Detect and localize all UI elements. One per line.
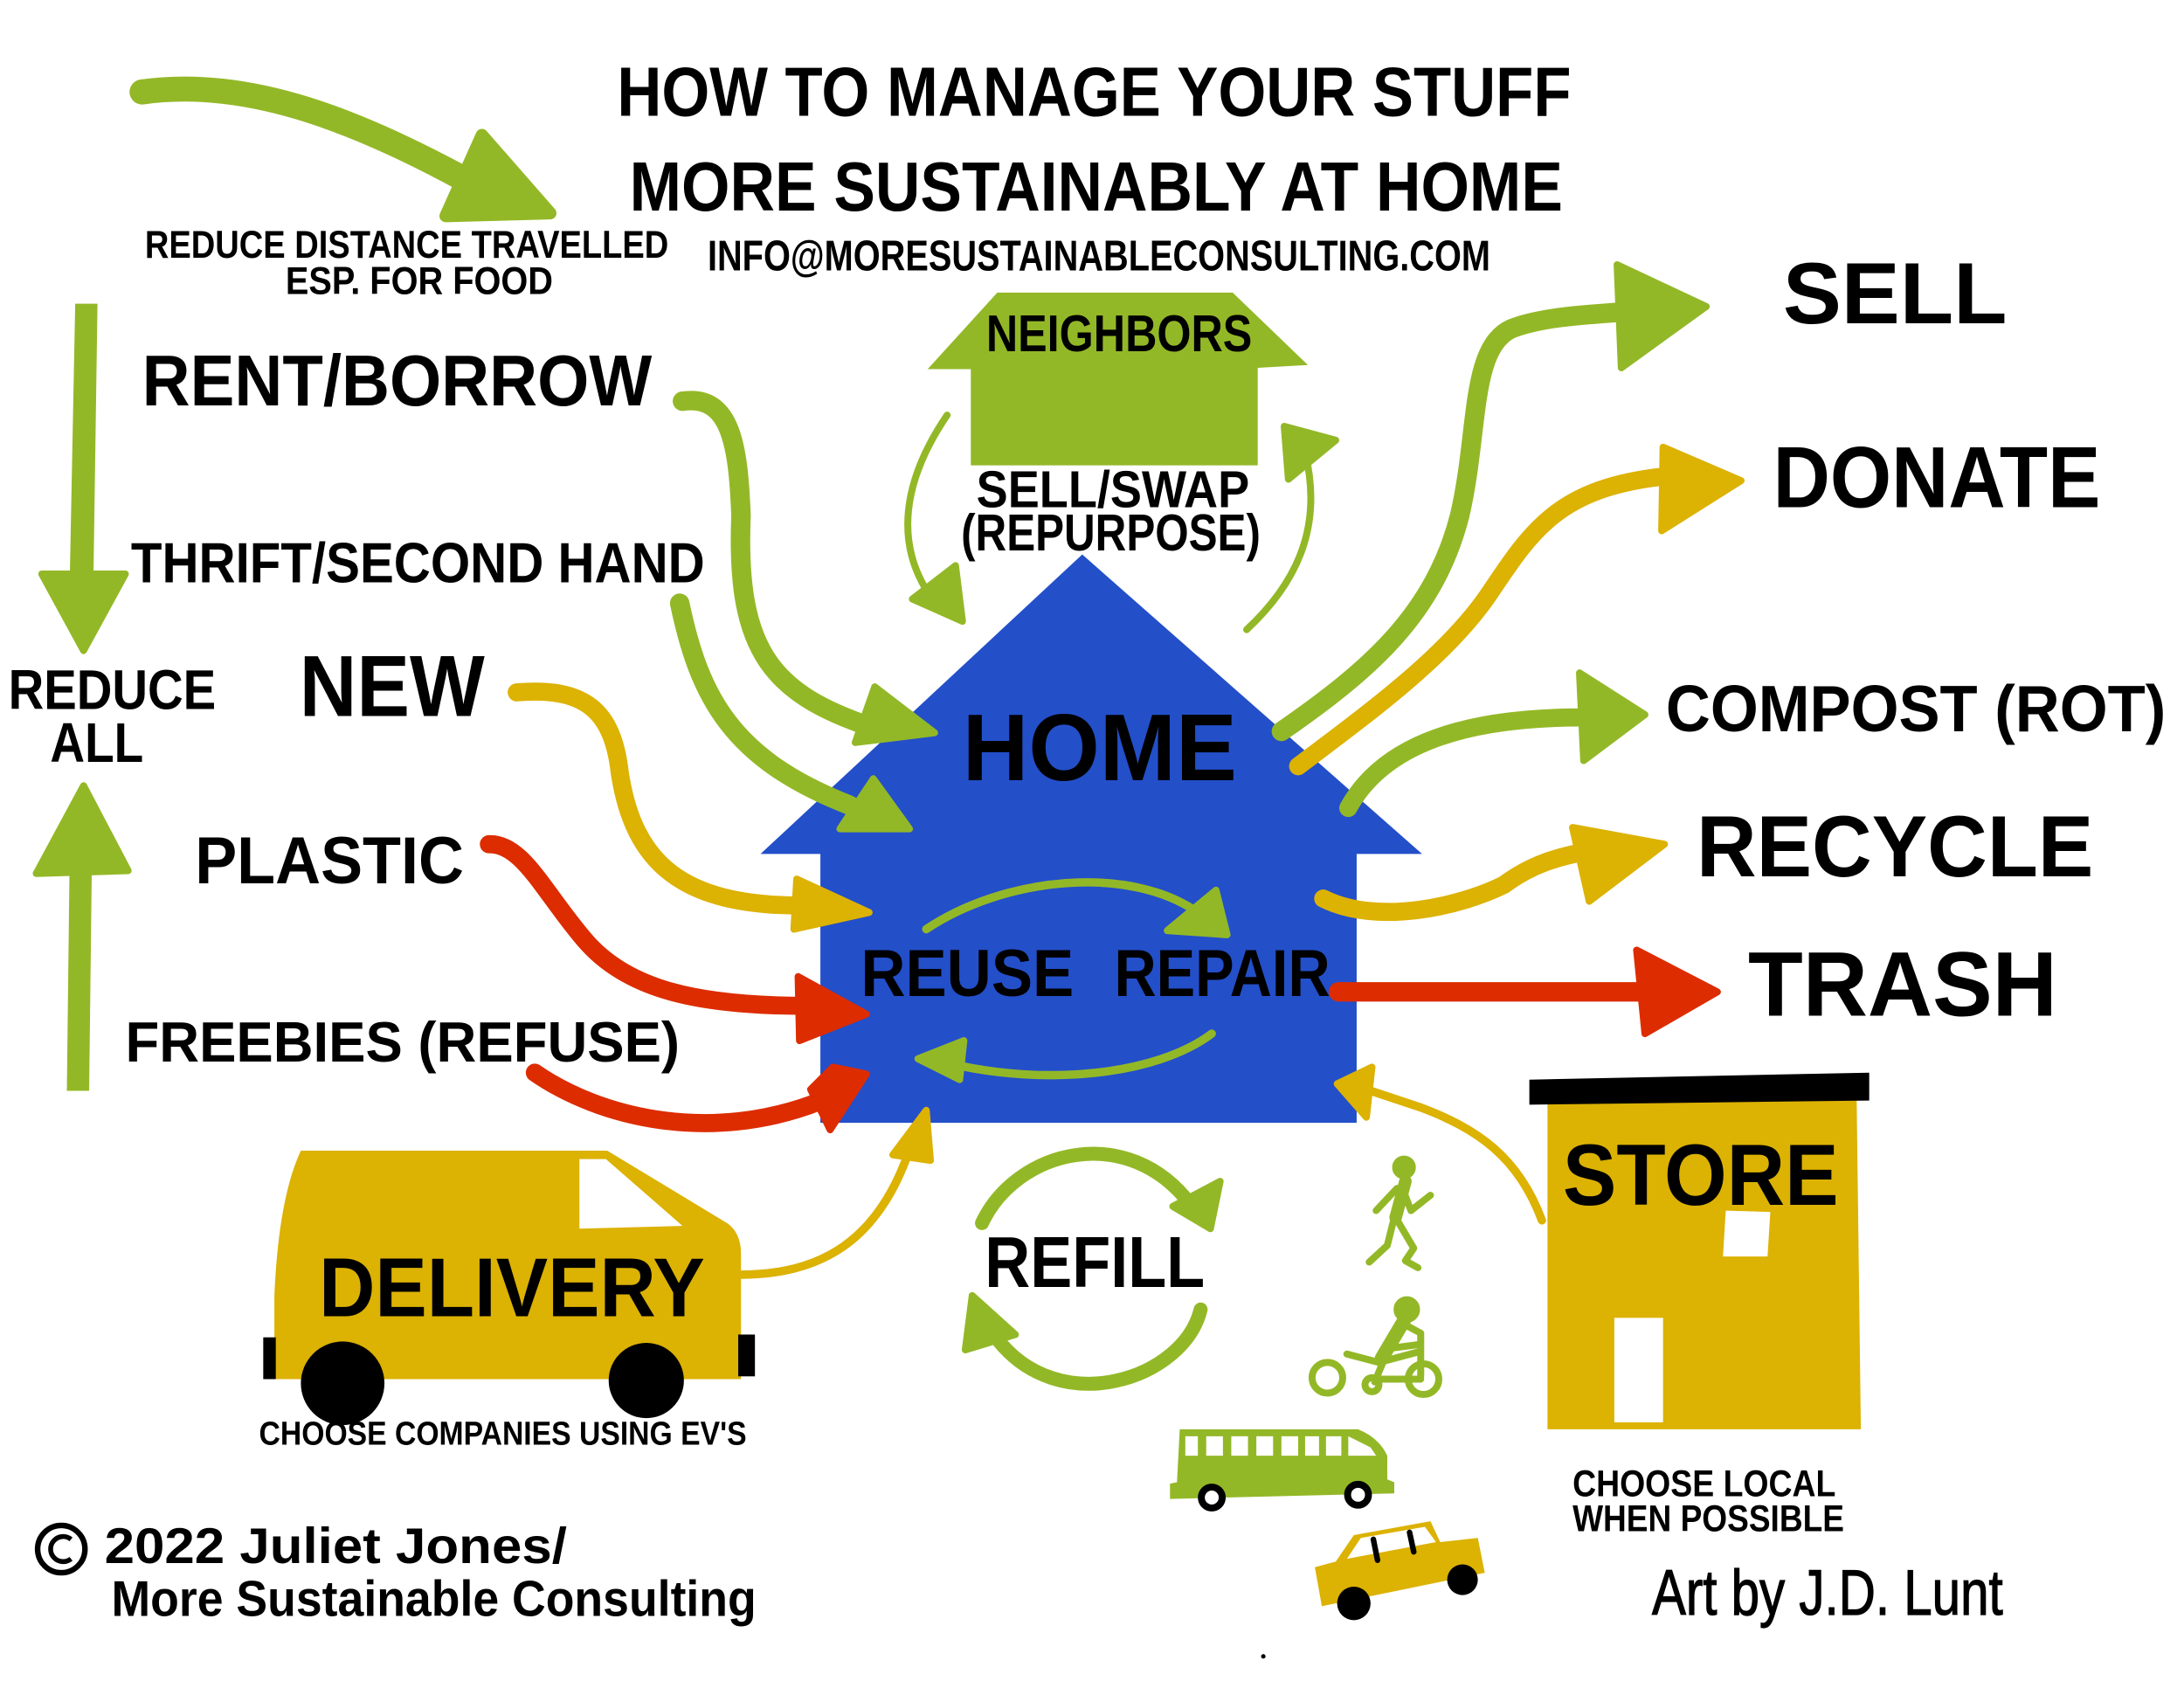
reuse repair label: REUSE bbox=[860, 937, 1074, 1011]
home label: HOME bbox=[963, 695, 1237, 800]
reduce all label bbox=[9, 659, 216, 774]
compost label: COMPOST (ROT) bbox=[1666, 672, 2166, 745]
reuse repair label: REPAIR bbox=[1115, 937, 1330, 1011]
store label: STORE bbox=[1563, 1127, 1839, 1223]
arrow: compost bbox=[1348, 673, 1645, 808]
rent/borrow label: RENT/BORROW bbox=[142, 340, 653, 421]
arrow: new bbox=[517, 692, 869, 929]
copyright credit: 2022 Juliet Jones/ bbox=[105, 1519, 567, 1574]
trash label: TRASH bbox=[1748, 933, 2057, 1035]
arrow: thrift bbox=[680, 603, 909, 829]
reduce all label: REDUCE bbox=[9, 659, 216, 722]
title: MORE SUSTAINABLY AT HOME bbox=[630, 148, 1563, 225]
arrow: repair bbox=[918, 1034, 1212, 1080]
refill label: REFILL bbox=[985, 1221, 1205, 1303]
arrow: freebies bbox=[535, 1067, 867, 1130]
arrow: recycle bbox=[1324, 827, 1664, 912]
arrow: rent bbox=[682, 401, 935, 743]
arrow: delivery to home bbox=[741, 1110, 930, 1275]
recycle label: RECYCLE bbox=[1697, 799, 2093, 895]
reduce distance label: REDUCE DISTANCE TRAVELLED bbox=[145, 224, 668, 266]
icon: cyclist bbox=[1312, 1300, 1439, 1394]
reduce distance label: ESP. FOR FOOD bbox=[286, 259, 553, 302]
arrow: donate bbox=[1298, 447, 1741, 766]
arrow: to neighbors left bbox=[908, 415, 963, 621]
neighbors house bbox=[928, 293, 1308, 466]
reuse repair label bbox=[860, 937, 1330, 1011]
plastic label: PLASTIC bbox=[195, 824, 464, 898]
sell/swap label: (REPURPOSE) bbox=[961, 504, 1261, 562]
delivery note: CHOOSE COMPANIES USING EV'S bbox=[259, 1415, 747, 1452]
arrow: sell bbox=[1282, 265, 1706, 731]
arrow: plastic bbox=[489, 844, 867, 1041]
art credit: Art by J.D. Lunt bbox=[1652, 1557, 2003, 1629]
sell/swap label bbox=[961, 460, 1261, 562]
arrow: reuse bbox=[926, 882, 1227, 935]
choose local note bbox=[1572, 1463, 1844, 1539]
choose local note: WHEN POSSIBLE bbox=[1572, 1498, 1844, 1539]
icon: bus bbox=[1170, 1429, 1394, 1508]
delivery label: DELIVERY bbox=[319, 1242, 705, 1335]
icon: walker bbox=[1369, 1159, 1430, 1268]
arrow: reduce distance bbox=[142, 89, 550, 216]
contact email: INFO@MORESUSTAINABLECONSULTING.COM bbox=[708, 232, 1490, 280]
arrow: reduce all up bbox=[36, 785, 128, 1090]
arrow: store to home bbox=[1337, 1067, 1542, 1221]
delivery van bbox=[263, 1151, 755, 1425]
donate label: DONATE bbox=[1773, 429, 2100, 525]
title bbox=[617, 52, 1571, 225]
sell/swap label: SELL/SWAP bbox=[977, 460, 1249, 518]
reduce distance label bbox=[145, 224, 668, 302]
sell label: SELL bbox=[1783, 246, 2008, 342]
reduce all label: ALL bbox=[50, 711, 143, 774]
freebies label: FREEBIES (REFUSE) bbox=[125, 1010, 680, 1074]
refill arrows bbox=[965, 1154, 1220, 1384]
arrow: to neighbors right bbox=[1247, 426, 1336, 630]
copyright credit: More Sustainable Consulting bbox=[112, 1572, 757, 1628]
store building bbox=[1530, 1073, 1870, 1429]
arrow: trash bbox=[1338, 950, 1717, 1034]
choose local note: CHOOSE LOCAL bbox=[1572, 1463, 1835, 1505]
new label: NEW bbox=[300, 639, 485, 735]
thrift label: THRIFT/SECOND HAND bbox=[131, 530, 705, 594]
title: HOW TO MANAGE YOUR STUFF bbox=[617, 52, 1571, 130]
copyright credit bbox=[38, 1519, 757, 1628]
icon: taxi bbox=[1315, 1521, 1485, 1620]
home house bbox=[761, 555, 1422, 1123]
neighbors label: NEIGHBORS bbox=[986, 305, 1252, 363]
arrow: reduce all down bbox=[42, 304, 125, 651]
